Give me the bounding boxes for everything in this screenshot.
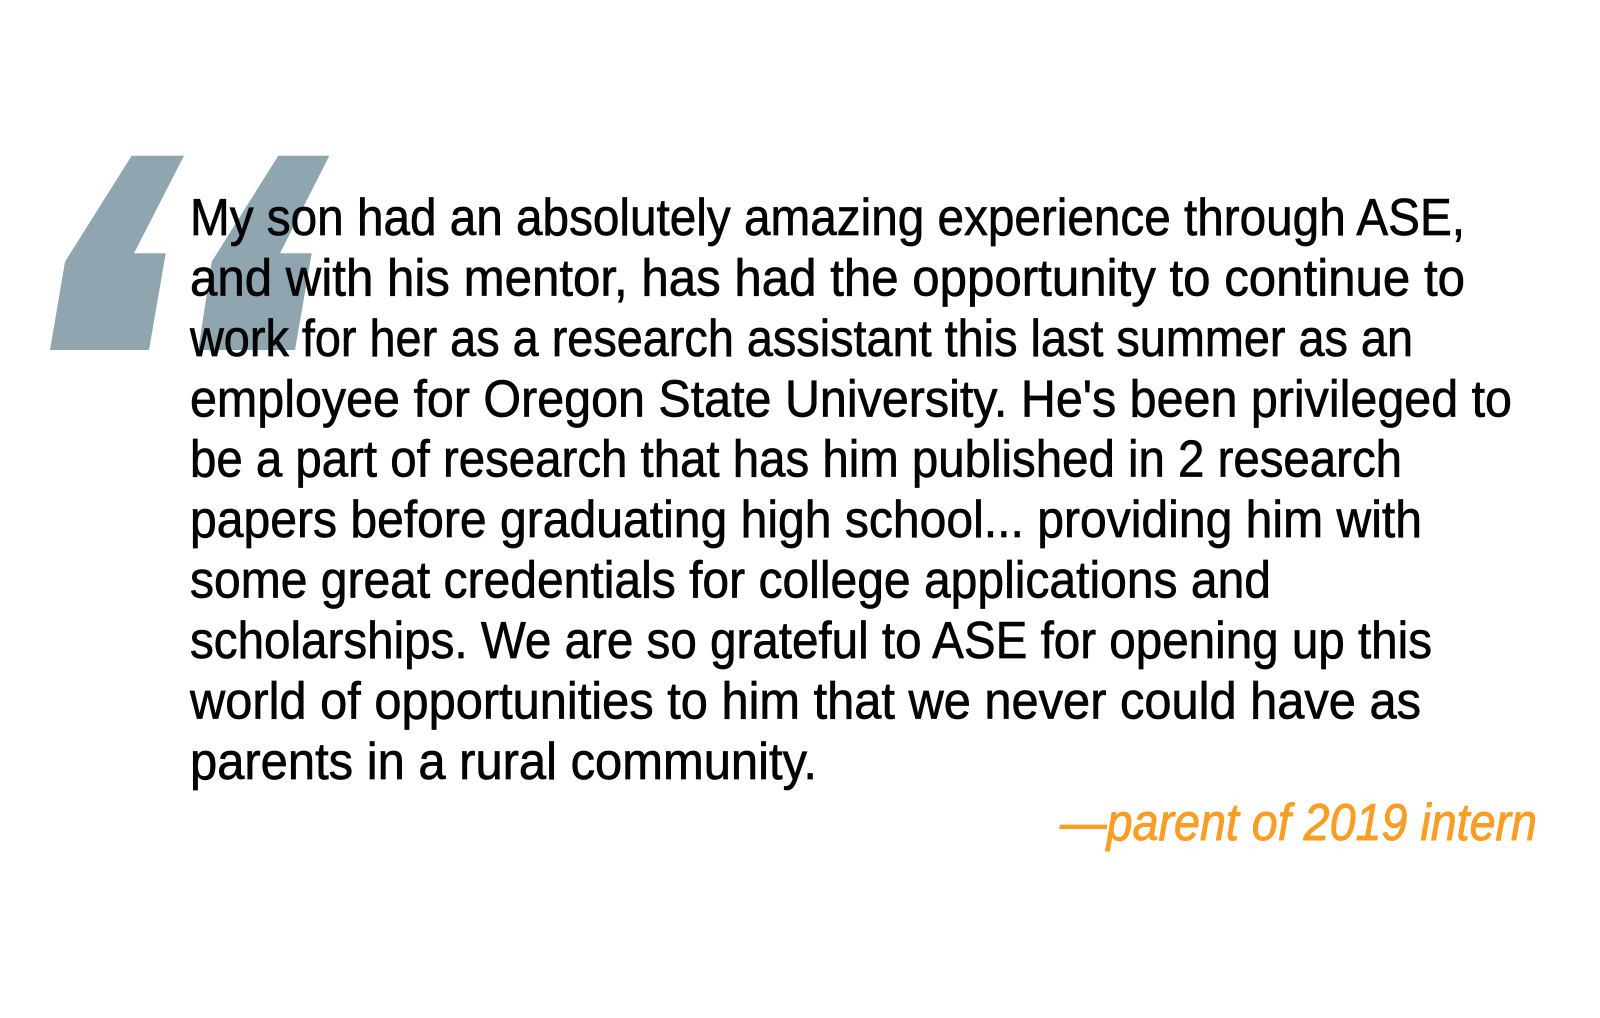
icon: opening quotation mark	[50, 156, 329, 350]
quote text: parents in a rural community.	[190, 733, 817, 791]
quote text: some great credentials for college applications and	[190, 552, 1271, 610]
quote text: employee for Oregon State University. He's been privileged to	[190, 370, 1512, 428]
quote text	[189, 189, 1512, 791]
quote text: work for her as a research assistant this last summer as an	[189, 310, 1413, 368]
quote text: and with his mentor, has had the opportunity to continue to	[190, 250, 1465, 308]
quote text: be a part of research that has him published in 2 research	[190, 430, 1402, 488]
quote text: My son had an absolutely amazing experience through ASE,	[190, 189, 1465, 247]
quote text: world of opportunities to him that we never could have as	[189, 672, 1421, 730]
quote text: papers before graduating high school... providing him with	[190, 491, 1422, 549]
quote text: scholarships. We are so grateful to ASE for opening up this	[190, 612, 1432, 670]
attribution: —parent of 2019 intern	[1059, 794, 1537, 852]
